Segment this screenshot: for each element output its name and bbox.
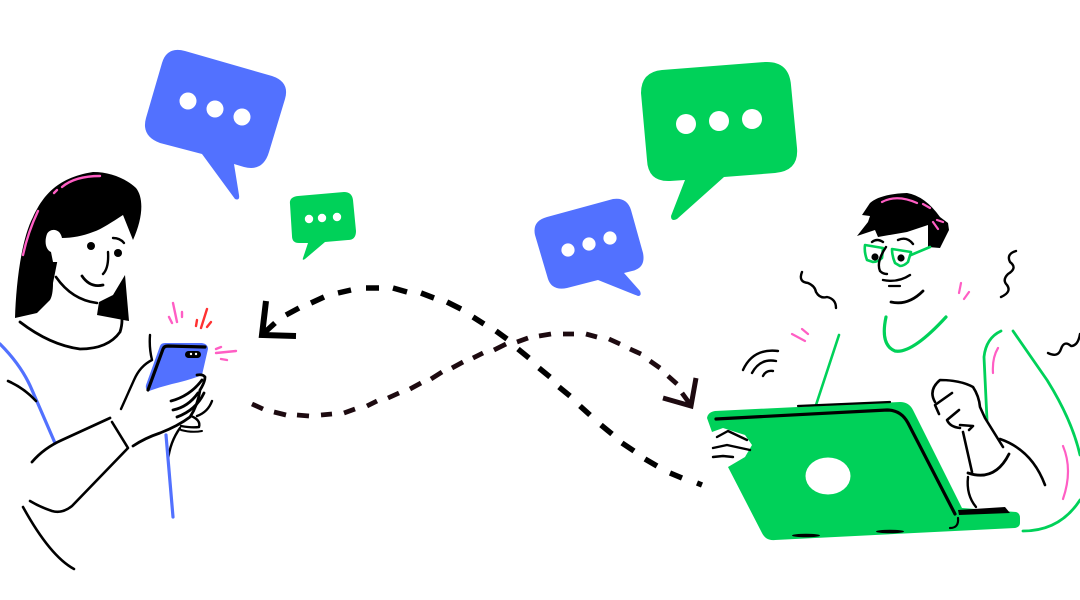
pink accents — [792, 283, 1068, 499]
man with laptop — [707, 193, 1080, 540]
blue shoulder line — [0, 344, 55, 443]
hand holding phone — [121, 335, 212, 460]
woman ear — [46, 230, 62, 262]
neckline — [20, 320, 122, 349]
blue torso line — [166, 435, 173, 517]
green glasses — [865, 245, 930, 266]
dashed arrow: laptop to woman — [262, 288, 702, 485]
large green speech bubble — [641, 62, 797, 220]
dashed arrow: phone to laptop — [252, 334, 696, 416]
stress squiggles — [801, 251, 1080, 355]
hair highlights — [23, 176, 100, 255]
phone — [146, 343, 208, 391]
man face — [871, 239, 923, 303]
notification sparks — [169, 303, 236, 360]
man hair — [857, 193, 949, 248]
man hair highlights — [882, 198, 943, 229]
small green speech bubble — [290, 192, 356, 260]
woman face — [56, 238, 124, 303]
laptop — [707, 402, 1020, 540]
woman hair — [15, 172, 141, 318]
woman right hair — [97, 275, 129, 321]
arm and sleeve lines — [8, 381, 128, 569]
woman with phone — [0, 172, 236, 569]
green body lines — [816, 317, 1080, 531]
man left hand on laptop — [713, 431, 750, 457]
large blue speech bubble — [145, 50, 286, 200]
man fist and arm — [932, 380, 1045, 507]
small blue speech bubble — [534, 199, 644, 296]
wifi arcs — [743, 351, 778, 376]
